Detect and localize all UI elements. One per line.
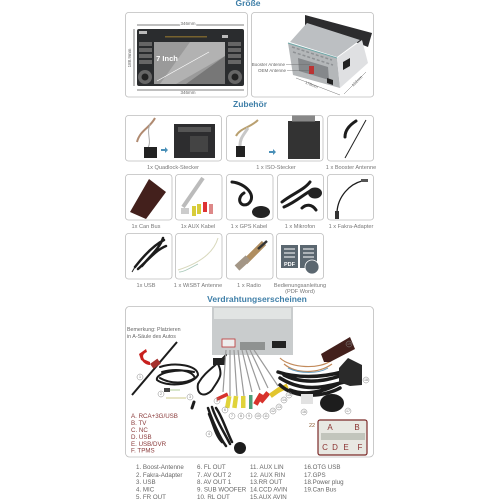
list: column 1: 4. MIC [136, 486, 155, 494]
caption: USB: 1x USB [137, 283, 156, 289]
panel: rear view dimensions [252, 12, 374, 97]
connector map: 22 [309, 423, 315, 429]
numbered markers: 15 [287, 393, 291, 397]
numbered markers: 14 [282, 398, 286, 402]
list: column 4: 16.OTG USB [304, 464, 340, 471]
numbered markers: 4 [208, 432, 210, 436]
accessory: WiSBT Antenne [176, 234, 222, 279]
caption: WiSBT Antenne: 1 x WiSBT Antenne [174, 283, 222, 289]
connector map [309, 420, 367, 455]
arrow: A-pillar [139, 349, 150, 365]
numbered markers: 17 [346, 409, 350, 413]
caption: Quadlock-Stecker: 1x Quadlock-Stecker [147, 165, 199, 171]
accessory: GPS Kabel [226, 174, 273, 220]
caption: Booster Antenne: 1 x Booster Antenne [326, 165, 376, 171]
width dimension bottom: 346mm [180, 90, 196, 95]
list: column 1: 2. Fakra-Adapter [136, 472, 182, 479]
accessory: PDF manual icon: PDF [284, 262, 296, 268]
list: column 3: 12. AUX RIN [250, 472, 285, 479]
panel: wiring diagram [126, 306, 374, 457]
numbered markers: 16 [302, 410, 306, 414]
connector legend: E. USB/DVR [131, 441, 167, 448]
numbered markers: 3 [189, 395, 191, 399]
numbered markers: 11 [264, 414, 268, 418]
caption: Can Bus: 1x Can Bus [132, 224, 161, 230]
caption: ISO-Stecker: 1 x ISO-Stecker [256, 165, 296, 171]
connector map: D [332, 443, 338, 452]
list: column 3: 14.CCD AVIN [250, 486, 287, 494]
RCA connectors [216, 350, 289, 409]
head unit rear [288, 15, 372, 88]
screen size label: 7 Inch [156, 54, 178, 63]
list: column 2: 9. SUB WOOFER [197, 486, 247, 494]
rear dimension marks [296, 72, 366, 95]
connector legend: D. USB [131, 434, 152, 441]
numbered markers: 19 [347, 342, 351, 346]
width dimension top: 346mm [180, 21, 196, 26]
numbered markers [137, 341, 369, 437]
connector map: F [358, 443, 363, 452]
caption: Radio: 1 x Radio [237, 283, 261, 289]
connector legend: C. NC [131, 427, 148, 434]
antenna [132, 342, 177, 395]
height dimension: 188.9mm [127, 48, 132, 67]
caption: Fakra-Adapter: 1 x Fakra-Adapter [329, 224, 374, 230]
antenna labels [252, 62, 310, 73]
antenna labels: OEM Antenne [258, 68, 286, 73]
numbered markers: 12 [271, 409, 275, 413]
GPS puck [320, 394, 344, 412]
panel: front dimensions [126, 12, 248, 97]
numbered markers: 5 [216, 399, 218, 403]
accessory: PDF manual icon [276, 234, 324, 279]
list: column 3: 11. AUX LIN [250, 464, 284, 471]
numbered markers: 13 [277, 405, 281, 409]
caption: manual: (PDF Word) [285, 289, 315, 295]
list: column 2: 7. AV OUT 2 [197, 472, 232, 479]
numbered markers: 7 [231, 414, 233, 418]
numbered markers: 18 [364, 378, 368, 382]
list: column 4: 17.GPS [304, 472, 326, 479]
connector map: A [327, 423, 333, 432]
head unit front [137, 29, 244, 86]
accessory: Booster Antenne [328, 116, 374, 161]
list: column 3: 13.RR OUT [250, 479, 283, 486]
connector legend: B. TV [131, 420, 147, 427]
numbered markers: 2 [160, 392, 162, 396]
fakra and usb leads [164, 388, 186, 398]
note: in A-Säule des Autos [127, 334, 176, 340]
heading: Verdrahtungserscheinen: Verdrahtungserscheinen [207, 294, 307, 304]
list: column 4: 19.Can Bus [304, 486, 336, 494]
antenna labels: Booster Antenne [252, 62, 285, 67]
accessory: Fakra-Adapter [328, 174, 374, 220]
caption: manual: Bedienungsanleitung [274, 283, 326, 289]
list: column 1: 3. USB [136, 479, 156, 486]
power harness [278, 358, 344, 395]
accessory: Can Bus [126, 174, 172, 220]
connector map: C [322, 443, 328, 452]
head unit [212, 307, 293, 355]
ISO plug [339, 358, 362, 386]
connector map: E [343, 443, 349, 452]
numbered markers: 10 [256, 414, 260, 418]
numbered markers: 8 [240, 414, 242, 418]
white plug [301, 394, 313, 404]
list: column 4: 18.Power plug [304, 479, 344, 486]
connector legend: A. RCA+3G/USB [131, 413, 178, 420]
connector map: B [354, 423, 360, 432]
caption: GPS Kabel: 1 x GPS Kabel [231, 224, 267, 230]
accessory: AUX Kabel [176, 174, 222, 220]
accessory: USB [126, 234, 172, 279]
numbered markers: 9 [248, 414, 250, 418]
list: column 2: 8. AV OUT 1 [197, 479, 232, 486]
heading: Zubehör: Zubehör [233, 99, 268, 109]
accessory: Radio [226, 234, 273, 279]
accessory: Quadlock [126, 116, 222, 161]
black cable coils [157, 355, 246, 454]
note: Bemerkung: Platzieren [127, 327, 181, 333]
numbered markers: 6 [224, 408, 226, 412]
numbered markers: 1 [139, 375, 141, 379]
caption: AUX Kabel: 1x AUX Kabel [181, 224, 215, 230]
list: column 2: 6. FL OUT [197, 464, 226, 471]
list: column 1: 1. Boost-Antenne [136, 464, 184, 471]
connector legend: F. TPMS [131, 448, 155, 454]
caption: Mikrofon: 1 x Mikrofon [285, 224, 315, 230]
rear dimension marks: 102mm [350, 74, 364, 87]
Can Bus box [321, 337, 355, 362]
rear dimension marks: 178mm [304, 80, 319, 90]
accessory: Mikrofon [278, 174, 324, 220]
accessory: ISO [226, 116, 323, 161]
